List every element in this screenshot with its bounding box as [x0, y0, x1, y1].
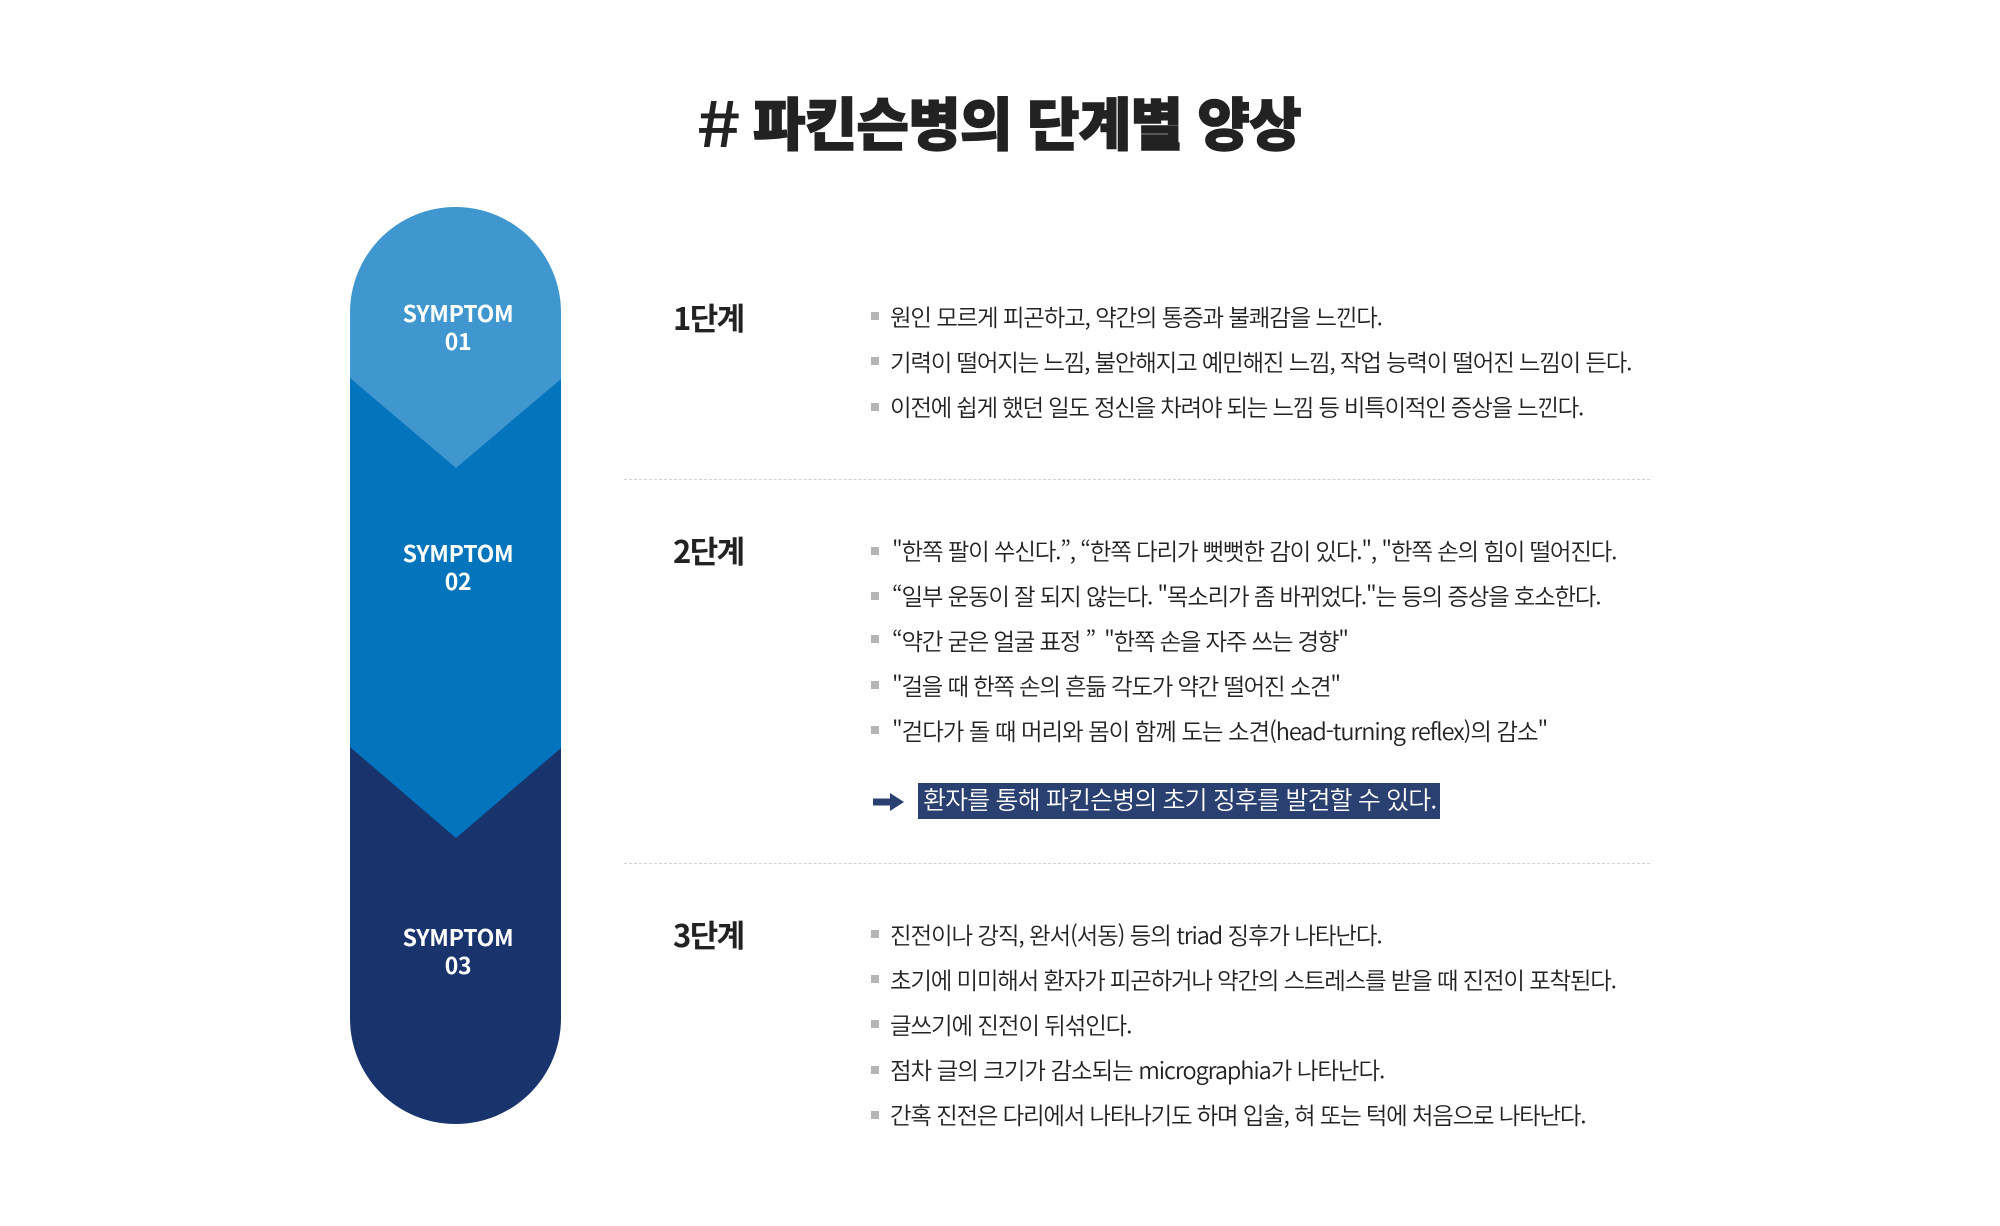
heading: stage 3: 3단계	[673, 911, 744, 956]
heading: stage 1: 1단계	[673, 294, 744, 339]
item: 글쓰기에 진전이 뒤섞인다.	[890, 1007, 1131, 1041]
segment: symptom 01: 01	[445, 323, 471, 357]
item: 기력이 떨어지는 느낌, 불안해지고 예민해진 느낌, 작업 능력이 떨어진 느낌이 든다.	[890, 344, 1631, 378]
stage 2 list	[871, 533, 1616, 747]
item: 간혹 진전은 다리에서 나타나기도 하며 입술, 혀 또는 턱에 처음으로 나타난다.	[890, 1097, 1585, 1131]
stage 1 list	[871, 299, 1631, 423]
item: 점차 글의 크기가 감소되는 micrographia가 나타난다.	[890, 1052, 1384, 1086]
title: #	[696, 75, 741, 166]
item: "한쪽 팔이 쑤신다.”, “한쪽 다리가 뻣뻣한 감이 있다.", "한쪽 손의 힘이 떨어진다.	[892, 533, 1616, 567]
stage 3 list	[871, 917, 1616, 1131]
item: 이전에 쉽게 했던 일도 정신을 차려야 되는 느낌 등 비특이적인 증상을 느낀다.	[890, 389, 1583, 423]
item: "걷다가 돌 때 머리와 몸이 함께 도는 소견(head-turning reflex)의 감소"	[892, 713, 1547, 747]
icon: arrow	[873, 793, 904, 811]
segment: symptom 03: 03	[445, 947, 471, 981]
segment: symptom 01	[350, 207, 561, 468]
segment: symptom 01: SYMPTOM	[403, 295, 513, 329]
symptom pill chart	[350, 207, 561, 1124]
segment: symptom 03	[350, 700, 561, 1124]
segment: symptom 02	[350, 340, 561, 838]
title: 파킨슨병의 단계별 양상	[753, 80, 1301, 162]
item: “약간 굳은 얼굴 표정 ” "한쪽 손을 자주 쓰는 경향"	[892, 623, 1348, 657]
segment: symptom 02: SYMPTOM	[403, 535, 513, 569]
segment: symptom 03: SYMPTOM	[403, 919, 513, 953]
heading: stage 2: 2단계	[673, 527, 744, 572]
item: “일부 운동이 잘 되지 않는다. "목소리가 좀 바뀌었다."는 등의 증상을 호소한다.	[892, 578, 1600, 612]
item: 진전이나 강직, 완서(서동) 등의 triad 징후가 나타난다.	[890, 917, 1382, 951]
callout: 환자를 통해 파킨슨병의 초기 징후를 발견할 수 있다.	[923, 781, 1436, 817]
item: 초기에 미미해서 환자가 피곤하거나 약간의 스트레스를 받을 때 진전이 포착된다.	[890, 962, 1616, 996]
segment: symptom 02: 02	[445, 563, 471, 597]
item: 원인 모르게 피곤하고, 약간의 통증과 불쾌감을 느낀다.	[890, 299, 1382, 333]
item: "걸을 때 한쪽 손의 흔듦 각도가 약간 떨어진 소견"	[892, 668, 1340, 702]
